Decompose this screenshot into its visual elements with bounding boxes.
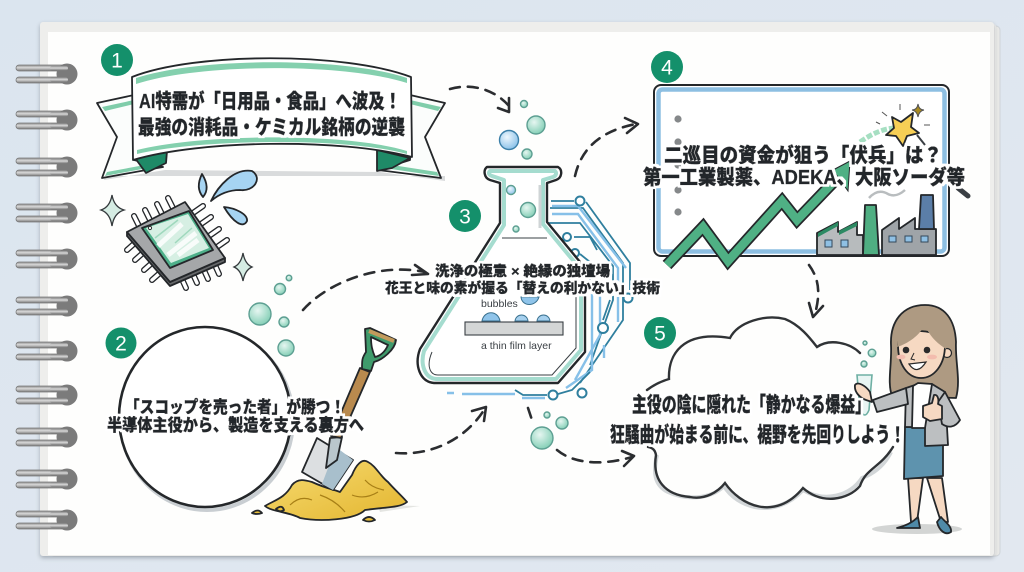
section 3: flask	[385, 100, 660, 449]
decorative bubbles near section 2	[249, 275, 294, 356]
banner title text: 最強の消耗品・ケミカル銘柄の逆襲	[138, 116, 405, 139]
section 4 text	[643, 143, 965, 189]
thin film diagram: bubbles	[481, 298, 518, 310]
presenter's test tube and bubbles	[855, 341, 876, 415]
number badge 5: 5	[654, 322, 666, 346]
arrow: bubbles to flask text	[303, 265, 428, 310]
section 2: shovel sellers	[106, 327, 420, 522]
section 5 text	[610, 393, 905, 447]
flask glass	[418, 167, 585, 383]
arrow: shovel to flask	[396, 407, 486, 453]
arrow: flask to panel 4	[575, 118, 638, 176]
panel frame	[654, 85, 949, 256]
arrow: panel 4 to cloud	[809, 265, 823, 317]
section 5 text: 狂騒曲が始まる前に、裾野を先回りしよう！	[610, 423, 905, 447]
icon: star	[860, 104, 968, 196]
banner title text: AI特需が「日用品・食品」へ波及！	[139, 89, 401, 113]
banner ribbon	[97, 58, 445, 181]
banner title text	[138, 89, 405, 139]
section 3 text: 花王と味の素が握る「替えの利かない」技術	[385, 280, 660, 296]
section 4: chart panel	[643, 51, 968, 265]
number badge 4: 4	[661, 56, 673, 80]
number badge 1: 1	[111, 50, 123, 72]
section 5: cloud and presenter	[610, 305, 962, 534]
number badge 4	[651, 51, 683, 83]
section 4 text: 第一工業製薬、ADEKA、大阪ソーダ等	[643, 165, 965, 189]
number badge 3: 3	[459, 206, 471, 228]
section 5 text: 主役の陰に隠れた「静かなる爆益」	[632, 393, 870, 417]
icon: shovel and gold pile	[252, 328, 420, 522]
number badge 1	[101, 44, 133, 76]
number badge 5	[644, 317, 676, 349]
section 3 text: 洗浄の極意 × 絶縁の独壇場	[435, 263, 610, 279]
rising bubbles	[500, 100, 568, 449]
icon: factories	[817, 190, 936, 255]
section 2 text: 「スコップを売った者」が勝つ！	[125, 397, 345, 417]
circuit traces	[447, 196, 632, 400]
section 3 text	[385, 263, 660, 296]
number badge 2	[106, 328, 136, 358]
section 1: title banner	[97, 44, 445, 181]
section 2 text: 半導体主役から、製造を支える裏方へ	[107, 415, 364, 435]
circle outline	[119, 327, 293, 510]
thin film diagram	[465, 297, 563, 352]
arrow: banner to flask	[450, 87, 509, 112]
number badge 2: 2	[115, 332, 127, 356]
presenter woman	[872, 305, 962, 534]
arrow: flask to cloud	[528, 408, 634, 466]
thought cloud	[647, 318, 893, 508]
thin film diagram: a thin film layer	[481, 340, 552, 352]
spiral binding rings	[16, 64, 78, 530]
section 4 text: 二巡目の資金が狙う「伏兵」は？	[664, 143, 942, 167]
icon: microchip with water drops	[101, 171, 257, 288]
section 2 text	[107, 397, 364, 435]
rising chart arrow	[667, 161, 850, 265]
number badge 3	[449, 200, 481, 232]
